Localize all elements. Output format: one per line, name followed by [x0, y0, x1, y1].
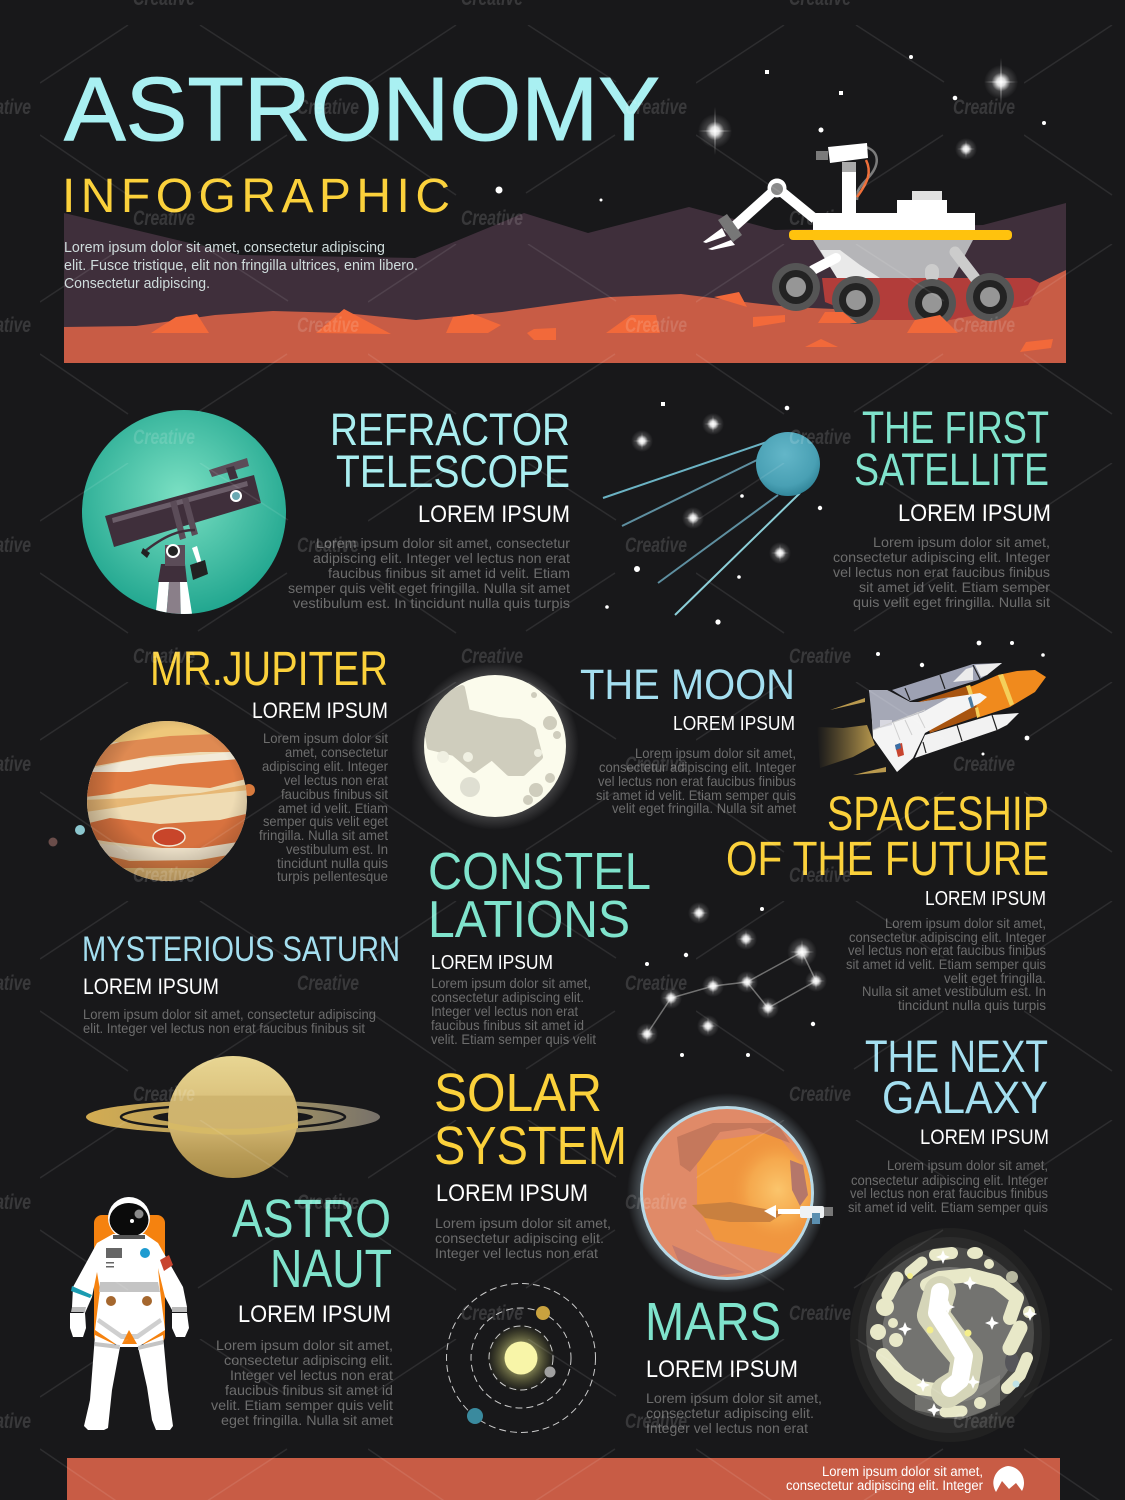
watermark text: Creative: [789, 426, 851, 449]
body text: fringilla. Nulla sit amet: [259, 827, 388, 843]
body text: Lorem ipsum dolor sit amet,: [431, 975, 591, 991]
subheading: LOREM IPSUM: [646, 1356, 798, 1383]
heading: TELESCOPE: [336, 446, 570, 497]
body text: consectetur adipiscing elit.: [431, 989, 584, 1005]
body text: [288, 535, 570, 611]
body text: Nulla sit amet vestibulum est. In: [862, 983, 1046, 999]
watermark text: Creative: [953, 1410, 1015, 1433]
watermark text: Creative: [789, 645, 851, 668]
heading: SATELLITE: [854, 444, 1049, 495]
subtitle: INFOGRAPHIC: [62, 170, 450, 223]
subheading: LOREM IPSUM: [898, 500, 1051, 527]
body text: consectetur adipiscing elit. Integer: [599, 759, 796, 775]
watermark text: Creative: [297, 972, 359, 995]
body text: semper quis velit eget fringilla. Nulla sit amet: [288, 580, 570, 596]
watermark text: Creative: [461, 207, 523, 230]
body text: velit. Etiam semper quis velit: [211, 1397, 393, 1413]
body text: consectetur adipiscing elit. Integer: [849, 929, 1046, 945]
intro text: elit. Fusce tristique, elit non fringilla ultrices, enim libero.: [64, 258, 418, 274]
body text: turpis pellentesque: [277, 868, 388, 884]
subheading: LOREM IPSUM: [920, 1125, 1049, 1149]
body text: tincidunt nulla quis: [277, 855, 388, 871]
heading: SYSTEM: [434, 1116, 627, 1176]
body text: faucibus finibus sit: [281, 786, 388, 802]
body text: vel lectus non erat faucibus finibus: [848, 942, 1046, 958]
subheading: LOREM IPSUM: [83, 974, 219, 999]
body text: adipiscing elit. Integer vel lectus non erat: [313, 550, 570, 566]
heading: [232, 1189, 392, 1299]
body text: quis velit eget fringilla. Nulla sit: [853, 594, 1050, 610]
body text: [596, 745, 796, 816]
body text: elit. Integer vel lectus non erat faucibus finibus sit: [83, 1020, 365, 1036]
body text: [211, 1337, 393, 1428]
body text: semper quis velit eget: [263, 813, 388, 829]
watermark text: Creative: [789, 207, 851, 230]
body text: velit eget fringilla.: [944, 970, 1046, 986]
heading: THE FIRST: [862, 402, 1049, 453]
watermark text: Creative: [297, 96, 359, 119]
heading: SOLAR: [434, 1063, 602, 1123]
body text: [259, 730, 388, 884]
panel: the next galaxy: [848, 1031, 1050, 1442]
body text: [435, 1215, 611, 1261]
subheading: LOREM IPSUM: [418, 501, 570, 528]
watermark text: Creative: [625, 1191, 687, 1214]
chart: constellation star map: [636, 902, 827, 1057]
watermark text: Creative: [789, 864, 851, 887]
panel: mars: [627, 1093, 833, 1436]
panel: hero header: [62, 55, 1066, 363]
heading: THE NEXT: [865, 1031, 1048, 1082]
subheading: LOREM IPSUM: [252, 698, 388, 723]
body text: faucibus finibus sit amet id: [225, 1382, 393, 1398]
intro text: Consectetur adipiscing.: [64, 276, 210, 292]
icon: sputnik satellite: [603, 402, 822, 625]
body text: velit eget fringilla. Nulla sit amet: [612, 800, 796, 816]
footer bar: [67, 1458, 1060, 1500]
watermark text: Creative: [625, 1410, 687, 1433]
body text: Lorem ipsum dolor sit amet,: [887, 1157, 1048, 1173]
heading: NAUT: [270, 1239, 392, 1299]
body text: vel lectus non erat faucibus finibus: [598, 773, 796, 789]
body text: Integer vel lectus non erat: [431, 1003, 578, 1019]
panel: first satellite: [603, 402, 1051, 625]
icon: astronaut figure: [70, 1197, 189, 1430]
heading: [434, 1063, 627, 1176]
watermark text: Creative: [789, 1302, 851, 1325]
watermark text: Creative: [297, 534, 359, 557]
watermark text: Creative: [625, 534, 687, 557]
icon: mars rover: [703, 143, 1040, 333]
watermark text: Creative: [297, 1191, 359, 1214]
heading: SPACESHIP: [827, 788, 1049, 841]
body text: Integer vel lectus non erat: [646, 1420, 808, 1436]
body text: consectetur adipiscing elit. Integer: [851, 1172, 1048, 1188]
icon: spiral galaxy: [850, 1228, 1050, 1442]
heading: MR.JUPITER: [150, 643, 388, 696]
heading: [428, 843, 651, 949]
panel: spaceship of the future: [726, 641, 1049, 1013]
body text: eget fringilla. Nulla sit amet: [221, 1412, 393, 1428]
heading: [726, 788, 1049, 886]
heading: ASTRO: [232, 1189, 391, 1249]
sky stars: [496, 55, 1046, 202]
body text: consectetur adipiscing elit.: [224, 1352, 393, 1368]
panel: mysterious saturn: [82, 930, 400, 1178]
heading: [330, 404, 570, 497]
body text: Lorem ipsum dolor sit amet,: [646, 1390, 822, 1406]
body text: adipiscing elit. Integer: [262, 758, 388, 774]
heading: [865, 1031, 1048, 1123]
panel: jupiter: [48, 643, 388, 884]
body text: Integer vel lectus non erat: [230, 1367, 393, 1383]
icon: full moon: [411, 662, 579, 830]
heading: GALAXY: [882, 1072, 1048, 1123]
body text: [846, 915, 1046, 1013]
body text: vestibulum est. In: [286, 841, 388, 857]
hero landscape: [64, 203, 1066, 363]
panel: constellations: [428, 843, 827, 1057]
icon: mountain logo: [993, 1466, 1024, 1492]
body text: vel lectus non erat faucibus finibus: [833, 564, 1050, 580]
body text: Lorem ipsum dolor sit amet,: [635, 745, 796, 761]
body text: vel lectus non erat faucibus finibus: [850, 1185, 1048, 1201]
body text: Lorem ipsum dolor sit amet, consectetur: [316, 535, 570, 551]
subheading: LOREM IPSUM: [673, 712, 795, 735]
icon: saturn planet: [86, 1056, 380, 1178]
body text: sit amet id velit. Etiam semper quis: [596, 787, 796, 803]
body text: sit amet id velit. Etiam semper: [859, 579, 1050, 595]
heading: MYSTERIOUS SATURN: [82, 930, 400, 969]
body text: [83, 1006, 376, 1036]
watermark text: Creative: [461, 645, 523, 668]
body text: [833, 534, 1050, 610]
body text: [646, 1390, 822, 1436]
heading: CONSTEL: [428, 843, 651, 901]
body text: [848, 1157, 1048, 1215]
footer text: Lorem ipsum dolor sit amet,: [822, 1464, 983, 1479]
icon: solar system diagram: [446, 1284, 596, 1432]
watermark text: Creative: [133, 645, 195, 668]
icon: mars planet with orbiter: [627, 1093, 833, 1293]
body text: faucibus finibus sit amet id velit. Etiam: [328, 565, 570, 581]
watermark text: Creative: [625, 314, 687, 337]
body text: Lorem ipsum dolor sit amet,: [435, 1215, 611, 1231]
body text: amet, consectetur: [285, 744, 388, 760]
intro text: [64, 240, 418, 292]
heading: REFRACTOR: [330, 404, 570, 455]
subheading: LOREM IPSUM: [436, 1180, 588, 1207]
watermark text: Creative: [953, 753, 1015, 776]
heading: THE MOON: [580, 661, 795, 709]
body text: faucibus finibus sit amet id: [431, 1017, 584, 1033]
watermark text: Creative: [133, 864, 195, 887]
subheading: LOREM IPSUM: [925, 887, 1046, 910]
body text: tincidunt nulla quis turpis: [898, 997, 1046, 1013]
panel: the moon: [411, 661, 796, 830]
panel: solar system: [434, 1063, 627, 1432]
watermark text: Creative: [297, 314, 359, 337]
panel: astronaut: [70, 1189, 393, 1430]
watermark text: Creative: [625, 972, 687, 995]
panel: refractor telescope: [82, 404, 570, 620]
body text: consectetur adipiscing elit.: [435, 1230, 604, 1246]
watermark text: Creative: [953, 314, 1015, 337]
body text: velit. Etiam semper quis velit: [431, 1031, 596, 1047]
footer text: [786, 1464, 983, 1493]
body text: vestibulum est. In tincidunt nulla quis turpis: [293, 595, 570, 611]
body text: sit amet id velit. Etiam semper quis: [846, 956, 1046, 972]
watermark text: Creative: [133, 1083, 195, 1106]
body text: Integer vel lectus non erat: [435, 1245, 598, 1261]
icon: jupiter planet with moons: [48, 720, 255, 883]
watermark text: Creative: [953, 96, 1015, 119]
body text: Lorem ipsum dolor sit amet,: [873, 534, 1050, 550]
body text: Lorem ipsum dolor sit amet,: [216, 1337, 393, 1353]
body text: amet id velit. Etiam: [278, 800, 388, 816]
footer text: consectetur adipiscing elit. Integer: [786, 1478, 983, 1493]
body text: [431, 975, 596, 1047]
heading: MARS: [645, 1292, 781, 1352]
heading: [854, 402, 1049, 495]
watermark text: Creative: [789, 1083, 851, 1106]
watermark text: Creative: [133, 426, 195, 449]
body text: consectetur adipiscing elit.: [646, 1405, 814, 1421]
heading: OF THE FUTURE: [726, 833, 1049, 886]
watermark text: Creative: [625, 96, 687, 119]
heading: LATIONS: [428, 891, 630, 949]
icon: space shuttle: [817, 641, 1046, 775]
body text: sit amet id velit. Etiam semper quis: [848, 1199, 1048, 1215]
body text: Lorem ipsum dolor sit amet, consectetur adipiscing: [83, 1006, 376, 1022]
subheading: LOREM IPSUM: [238, 1301, 391, 1328]
title: ASTRONOMY: [64, 60, 660, 160]
subheading: LOREM IPSUM: [431, 951, 553, 974]
watermark text: Creative: [133, 207, 195, 230]
body text: Lorem ipsum dolor sit amet,: [885, 915, 1046, 931]
watermark text: Creative: [461, 1302, 523, 1325]
body text: Lorem ipsum dolor sit: [263, 730, 388, 746]
watermark text: Creative: [625, 753, 687, 776]
intro text: Lorem ipsum dolor sit amet, consectetur adipiscing: [64, 240, 385, 256]
body text: vel lectus non erat: [284, 772, 388, 788]
icon: telescope: [82, 410, 286, 620]
body text: consectetur adipiscing elit. Integer: [833, 549, 1050, 565]
